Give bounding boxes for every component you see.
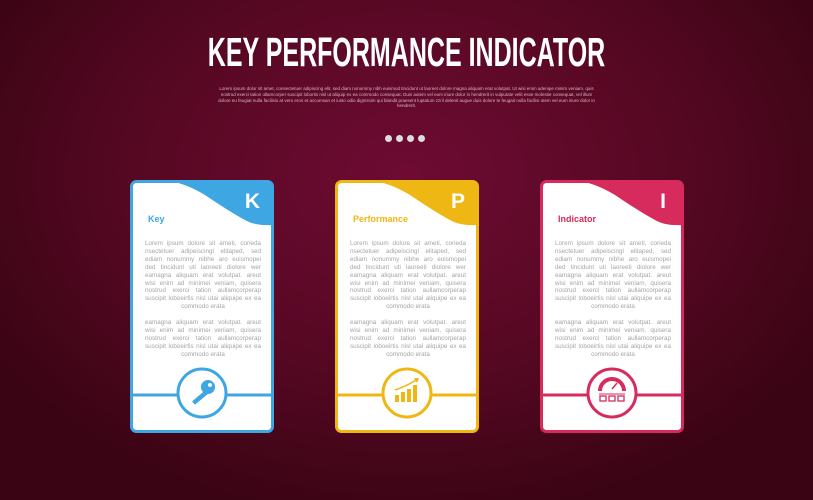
title: KEY PERFORMANCE INDICATOR [208, 29, 605, 75]
subtitle text: Lorem ipsum dolor sit amet, consectetuer adipiscing elit, sed diam nonummy nibh euismod tincidunt ut laoreet dolore magna aliquam erat volutpat. Ut wisi enim adenipe minim veniam, quis nostrud exerci tation ullamcorper suscipit lobortis nisl ut aliquip ex ea commodo consequat. Duis autem vel eum iriure dolor in hendrerit in vulputate velit esse molestie consequat, vel illum dolore eu feugiat nulla facilisis at vero eros et accumsan et iusto odio dignissim qui blandit praesent luptatum zzril delenit augue duis dolore te feugait nulla facilisi utem vel eum iriure dolor in hendrerit. [218, 86, 595, 108]
heading: Indicator: Indicator [558, 214, 596, 224]
text block: Lorem ipsum dolore sit ameti, corieda nsectetuer adipeiscingl elitaped, sed ediam nonummy nibhe aro euismopei ded tincidunt uti laoreeti diolore wer eamagna aliquam erat volutpat. areut wisi enim ad minimei veniam, quisera nostrud exerci tation aullamcorperap suscipit loboeirtis nisl utai aliquipe ex ea commodo erata [350, 240, 466, 310]
panel: I card: eamagna aliquam erat volutpat. areut wisi enim ad minimei veniam, quisera nostrud exerci tation aullamcorperap suscipit loboeirtis nisl utai aliquipe ex ea commodo erata [555, 319, 671, 358]
letter K: K [245, 190, 260, 213]
letter I: I [660, 190, 666, 213]
panel: P card: eamagna aliquam erat volutpat. areut wisi enim ad minimei veniam, quisera nostrud exerci tation aullamcorperap suscipit loboeirtis nisl utai aliquipe ex ea commodo erata [350, 319, 466, 358]
panel: K card: eamagna aliquam erat volutpat. areut wisi enim ad minimei veniam, quisera nostrud exerci tation aullamcorperap suscipit loboeirtis nisl utai aliquipe ex ea commodo erata [145, 319, 261, 358]
panel: K card [130, 180, 274, 433]
dots [385, 135, 425, 142]
panel: P card [335, 180, 479, 433]
heading: Performance: Performance [353, 214, 408, 224]
text block: Lorem ipsum dolore sit ameti, corieda nsectetuer adipeiscingl elitaped, sed ediam nonummy nibhe aro euismopei ded tincidunt uti laoreeti diolore wer eamagna aliquam erat volutpat. areut wisi enim ad minimei veniam, quisera nostrud exerci tation aullamcorperap suscipit loboeirtis nisl utai aliquipe ex ea commodo erata [555, 240, 671, 310]
text block: Lorem ipsum dolore sit ameti, corieda nsectetuer adipeiscingl elitaped, sed ediam nonummy nibhe aro euismopei ded tincidunt uti laoreeti diolore wer eamagna aliquam erat volutpat. areut wisi enim ad minimei veniam, quisera nostrud exerci tation aullamcorperap suscipit loboeirtis nisl utai aliquipe ex ea commodo erata [145, 240, 261, 310]
letter P: P [451, 190, 465, 213]
panel: I card [540, 180, 684, 433]
heading: Key: Key [148, 214, 165, 224]
